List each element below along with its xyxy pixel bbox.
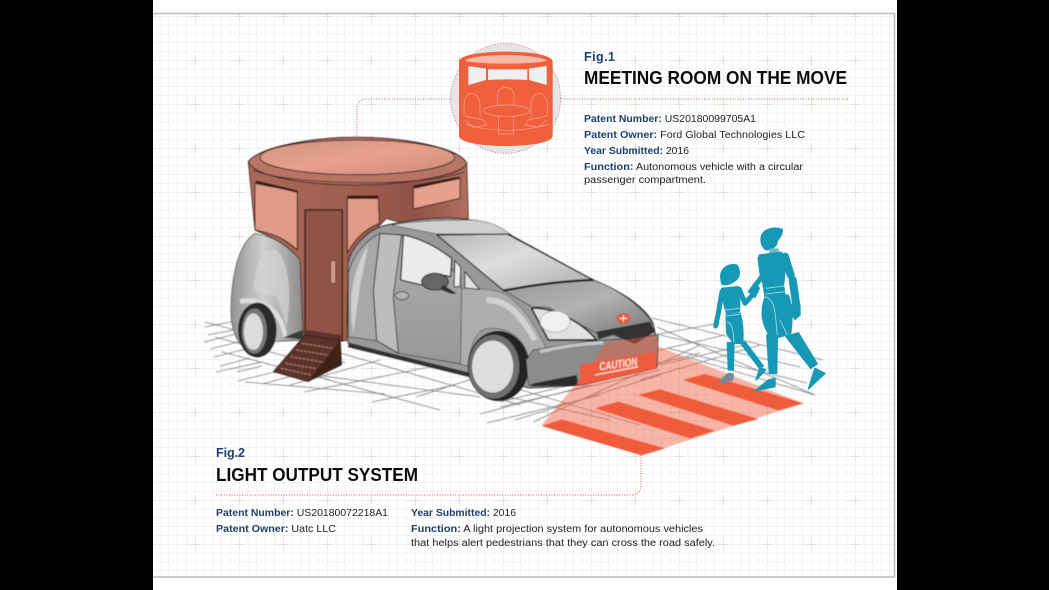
rear fender and wheel [231, 233, 303, 357]
adult and child pedestrians [716, 228, 825, 391]
front wheel [468, 331, 529, 401]
roof highlight [392, 220, 510, 234]
heading: Fig.1: Fig.1 [584, 50, 615, 64]
headlight [532, 308, 597, 340]
panel: Fig.1 text [584, 50, 847, 186]
adult [748, 228, 825, 391]
patent details [216, 508, 715, 549]
ground grid lines [204, 318, 823, 425]
mirror [422, 273, 448, 290]
window middle [347, 198, 379, 253]
page background with grid [153, 0, 897, 590]
car side details [348, 220, 547, 401]
sill shadow [348, 345, 470, 375]
icon: circular inset of meeting room [451, 43, 561, 153]
panel: Fig.2 text [216, 446, 715, 549]
patent details: Function: A light projection system for autonomous vehicles [411, 524, 703, 535]
patent details: Patent Owner: Ford Global Technologies LLC [584, 130, 805, 141]
caution sign [580, 352, 657, 385]
windshield [437, 234, 593, 290]
heading: Fig.2: Fig.2 [216, 446, 245, 460]
crossing stripes [542, 374, 803, 455]
car body [348, 218, 658, 388]
door [305, 210, 342, 341]
child [716, 265, 766, 383]
patent details: Function: Autonomous vehicle with a circular [584, 162, 804, 173]
light beam projection: CAUTION [599, 356, 638, 374]
title: light output: LIGHT OUTPUT SYSTEM [216, 464, 418, 485]
patent details: Patent Owner: Uatc LLC [216, 524, 336, 535]
patent details: that helps alert pedestrians that they can cross the road safely. [411, 538, 715, 549]
illustration: car with round compartment [231, 137, 803, 455]
window left [255, 183, 297, 250]
patent details: Year Submitted: 2016 [584, 146, 689, 157]
patent details: Patent Number: US20180072218A1 [216, 508, 388, 519]
patent details [584, 114, 805, 186]
window right [413, 178, 460, 209]
light beam projection [542, 335, 803, 455]
title: meeting room: MEETING ROOM ON THE MOVE [584, 67, 847, 88]
patent details: Year Submitted: 2016 [411, 508, 516, 519]
grille [597, 322, 655, 344]
door handle [395, 292, 409, 300]
side window [401, 235, 452, 285]
ramp [273, 335, 341, 382]
patent details: Patent Number: US20180099705A1 [584, 114, 756, 125]
round passenger compartment [248, 137, 468, 382]
hood and front [503, 280, 658, 387]
icon: dotted connector Fig.2 [216, 455, 641, 495]
badge [617, 313, 630, 323]
icon: dotted connector Fig.1 [357, 99, 848, 137]
patent details: passenger compartment. [584, 175, 706, 186]
